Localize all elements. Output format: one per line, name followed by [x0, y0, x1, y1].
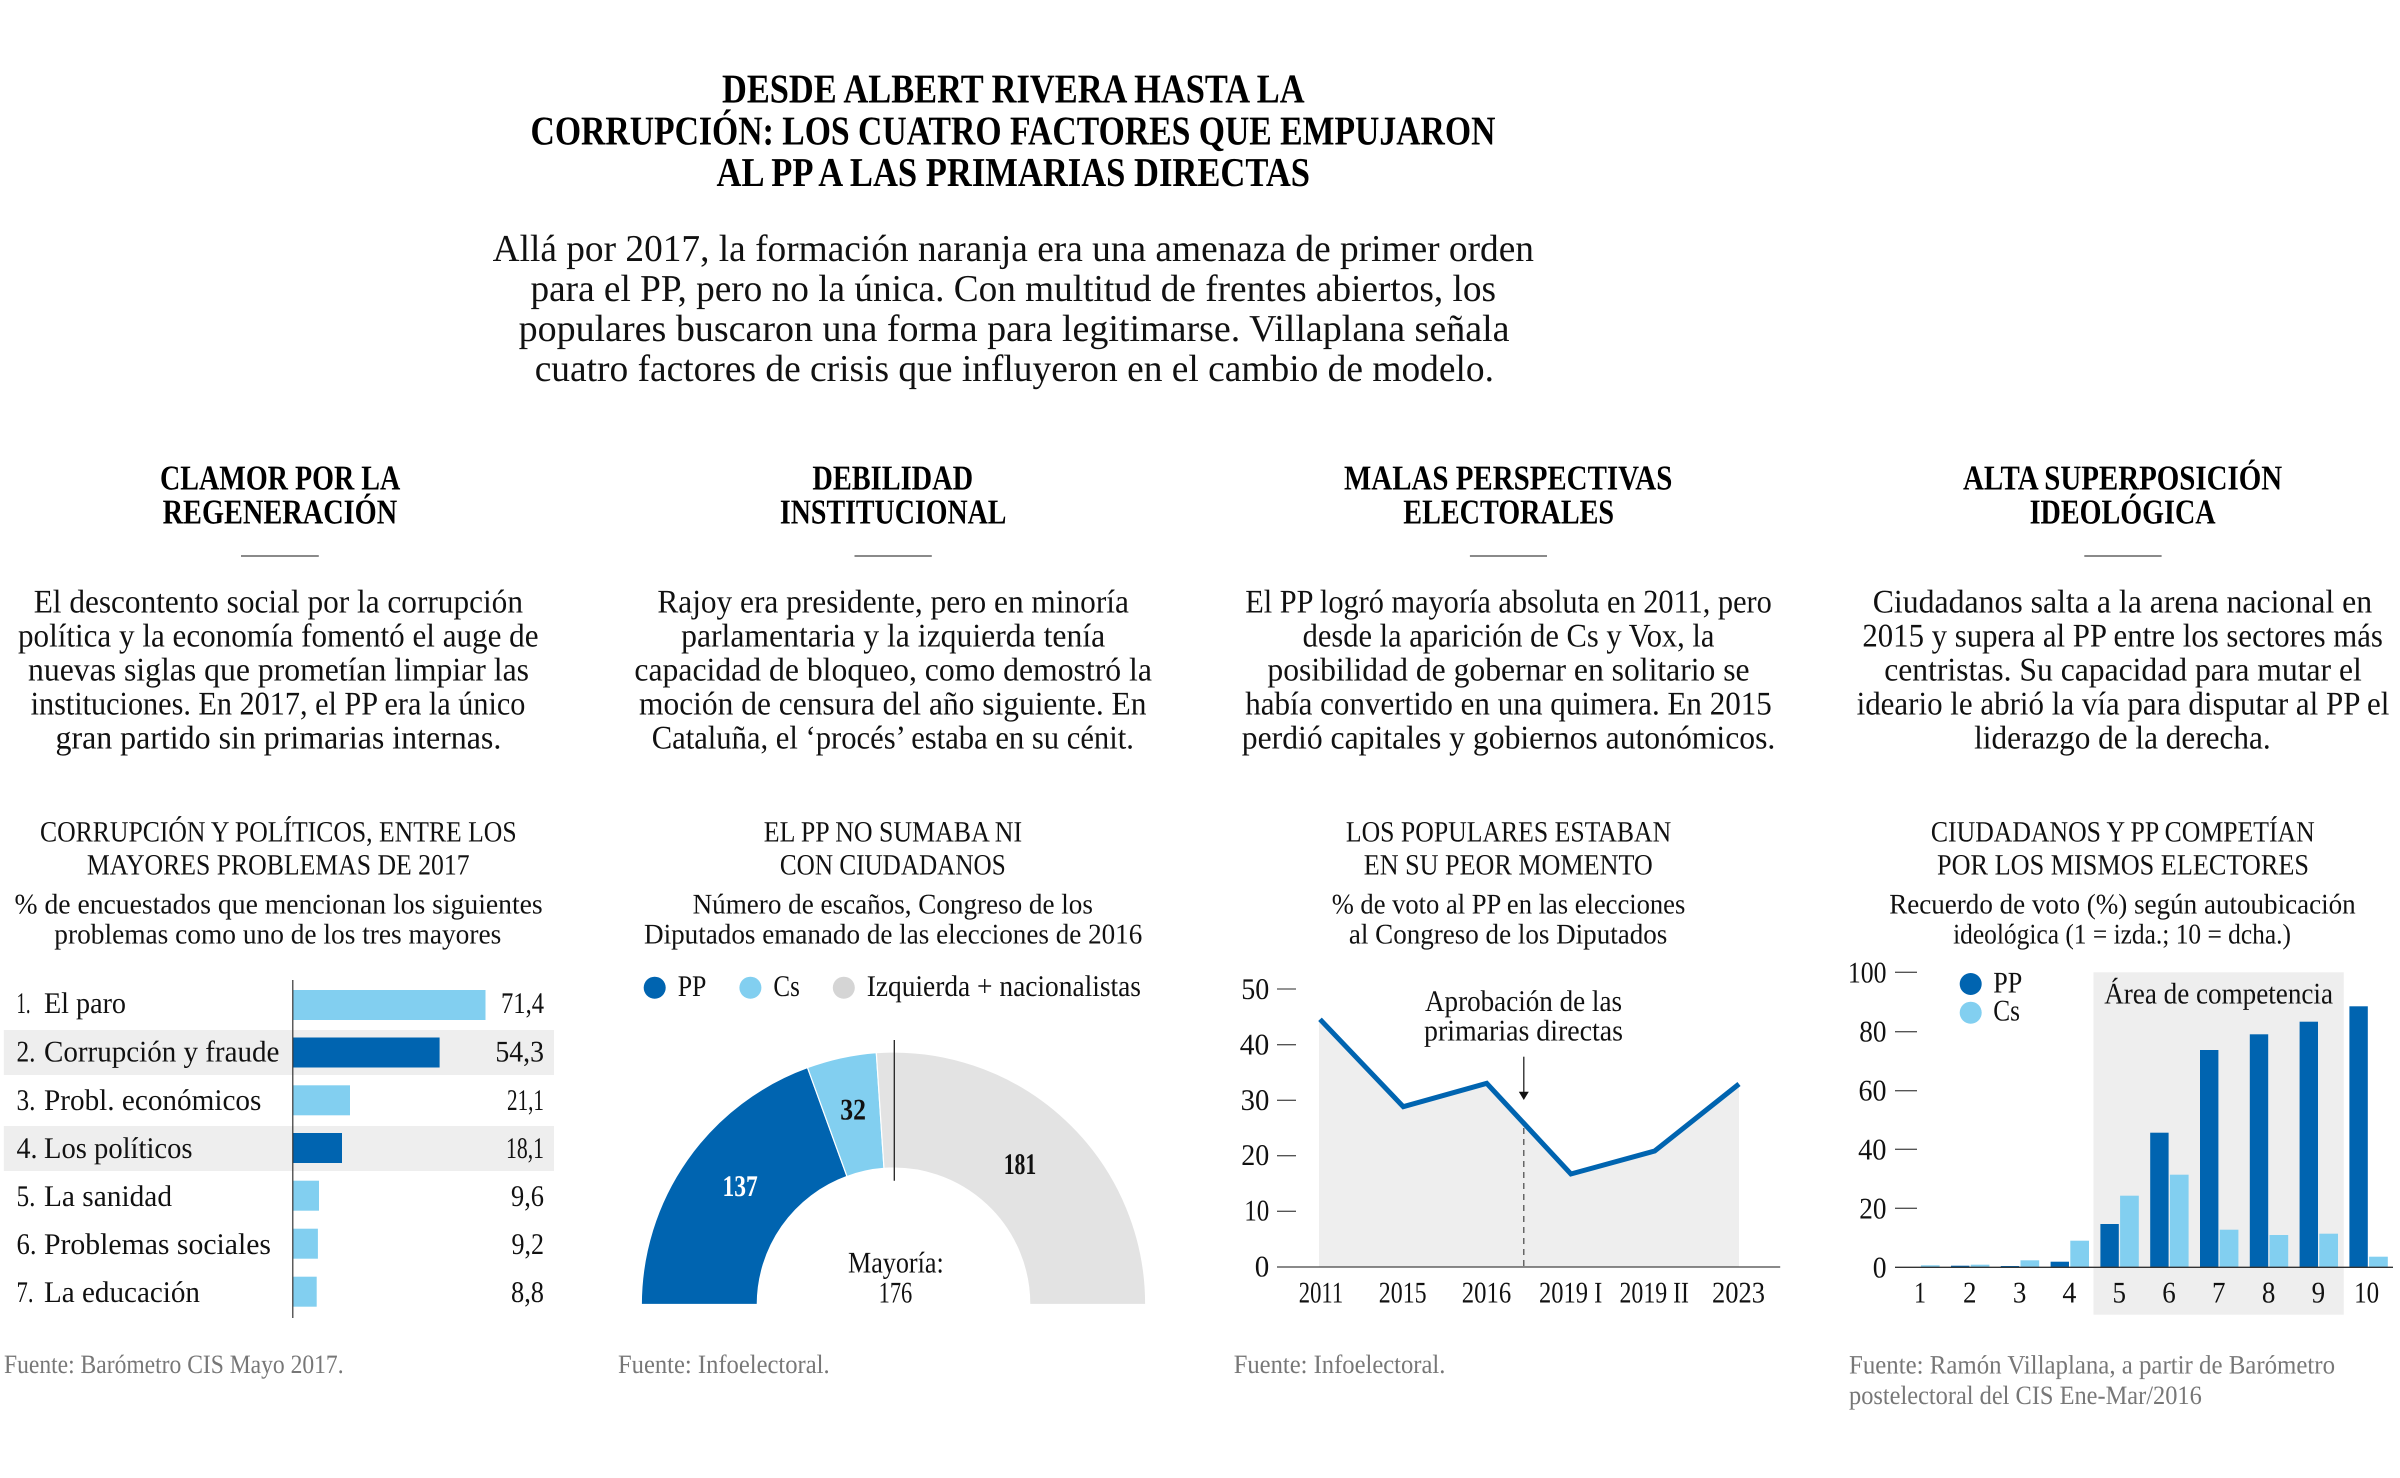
- bar: La educación: La educación: [44, 1276, 200, 1309]
- annotation: primarias directas: Aprobación de las: [1425, 985, 1622, 1018]
- body text: Rajoy era presidente, pero en minoría: [657, 585, 1129, 621]
- heading: ELECTORALES: [1403, 492, 1614, 531]
- source: Fuente: Barómetro CIS Mayo 2017.: [4, 1349, 344, 1379]
- bar: La educación: [16, 1276, 544, 1309]
- heading: [780, 458, 1006, 531]
- competition area: [2094, 972, 2344, 1315]
- x axis labels: [1299, 1277, 1765, 1310]
- body text: El PP logró mayoría absoluta en 2011, pero: [1245, 585, 1772, 621]
- y axis: 10: [1244, 1195, 1269, 1228]
- chart title: POR LOS MISMOS ELECTORES: [1937, 849, 2309, 881]
- body text: nuevas siglas que prometían limpiar las: [28, 653, 529, 689]
- body text: [1242, 585, 1775, 756]
- chart title: LOS POPULARES ESTABAN: [1346, 817, 1671, 849]
- intro text: Allá por 2017, la formación naranja era una amenaza de primer orden: [493, 228, 1534, 270]
- title: CORRUPCIÓN: LOS CUATRO FACTORES QUE EMPUJARON: [530, 108, 1496, 154]
- chart title: MAYORES PROBLEMAS DE 2017: [87, 849, 470, 881]
- body text: Ciudadanos salta a la arena nacional en: [1873, 585, 2372, 621]
- bar: Corrupción y fraude: [16, 1036, 544, 1069]
- x axis labels: 2019 II: [1620, 1277, 1689, 1310]
- data line: [1320, 1019, 1739, 1174]
- bar: Problemas sociales: 9,2: [512, 1228, 544, 1261]
- body text: instituciones. En 2017, el PP era la único: [31, 686, 525, 722]
- heading: ALTA SUPERPOSICIÓN: [1963, 458, 2282, 497]
- chart title: [1931, 816, 2315, 881]
- legend: [1960, 966, 2022, 1028]
- legend: Izquierda + nacionalistas: [867, 970, 1141, 1003]
- heading: MALAS PERSPECTIVAS: [1344, 458, 1672, 497]
- body text: capacidad de bloqueo, como demostró la: [634, 653, 1152, 689]
- x axis labels: 7: [2212, 1277, 2226, 1310]
- bar: Problemas sociales: [16, 1228, 544, 1261]
- body text: [18, 585, 538, 756]
- heading: IDEOLÓGICA: [2030, 492, 2216, 531]
- intro text: cuatro factores de crisis que influyeron en el cambio de modelo.: [535, 348, 1494, 390]
- bars: PP: [1951, 1006, 2368, 1267]
- bar: El paro: 1.: [16, 987, 30, 1020]
- bar: El paro: El paro: [44, 987, 126, 1020]
- bar: Los políticos: 18,1: [506, 1132, 544, 1165]
- bar: Problemas económicos: 21,1: [507, 1084, 544, 1117]
- panel: debilidad institucional: [618, 458, 1152, 1379]
- bar: Problemas económicos: [16, 1084, 544, 1117]
- intro text: populares buscaron una forma para legitimarse. Villaplana señala: [519, 308, 1510, 350]
- body text: perdió capitales y gobiernos autonómicos.: [1242, 720, 1775, 756]
- bar: Corrupción y fraude: 2.: [16, 1036, 36, 1069]
- chart title: CIUDADANOS Y PP COMPETÍAN: [1931, 816, 2315, 849]
- legend: PP: [1993, 966, 2022, 999]
- chart title: EN SU PEOR MOMENTO: [1364, 849, 1653, 881]
- bar: Los políticos: Los políticos: [44, 1132, 192, 1165]
- bar: La educación: 7.: [16, 1276, 34, 1309]
- x axis labels: 6: [2162, 1277, 2176, 1310]
- chart subtitle: [1332, 889, 1685, 950]
- body text: gran partido sin primarias internas.: [56, 720, 501, 756]
- x axis labels: 2019 I: [1539, 1277, 1602, 1310]
- bar: Problemas sociales: Problemas sociales: [44, 1228, 271, 1261]
- body text: había convertido en una quimera. En 2015: [1245, 686, 1772, 722]
- chart subtitle: al Congreso de los Diputados: [1349, 919, 1667, 950]
- y axis: 40: [1858, 1133, 1886, 1166]
- chart subtitle: Número de escaños, Congreso de los: [693, 889, 1093, 920]
- x axis labels: 9: [2312, 1277, 2325, 1310]
- body text: El descontento social por la corrupción: [34, 585, 523, 621]
- intro text: [493, 228, 1534, 390]
- source: Fuente: Infoelectoral.: [1234, 1349, 1445, 1379]
- x axis labels: 2015: [1379, 1277, 1427, 1310]
- y axis: 60: [1858, 1075, 1886, 1108]
- chart subtitle: problemas como uno de los tres mayores: [54, 919, 501, 950]
- body text: liderazgo de la derecha.: [1974, 720, 2271, 756]
- y axis: 0: [1873, 1251, 1886, 1284]
- x axis labels: 10: [2354, 1277, 2379, 1310]
- heading: INSTITUCIONAL: [780, 492, 1006, 531]
- title: [530, 66, 1496, 195]
- chart title: [40, 816, 517, 881]
- bar chart: [4, 980, 554, 1318]
- body text: centristas. Su capacidad para mutar el: [1884, 653, 2362, 689]
- x axis labels: 2: [1963, 1277, 1977, 1310]
- y axis: [1240, 973, 1296, 1284]
- semicircle chart: Mayoría:: [848, 1247, 944, 1280]
- bar: Problemas económicos: 3.: [16, 1084, 36, 1117]
- source: Fuente: Infoelectoral.: [618, 1349, 830, 1379]
- bar: El paro: [16, 987, 544, 1020]
- panel: malas perspectivas electorales: [1234, 458, 1780, 1379]
- body text: política y la economía fomentó el auge de: [18, 619, 538, 655]
- chart subtitle: % de voto al PP en las elecciones: [1332, 889, 1685, 920]
- arrow: [1519, 1057, 1529, 1100]
- chart title: CORRUPCIÓN Y POLÍTICOS, ENTRE LOS: [40, 816, 517, 849]
- body text: [634, 585, 1152, 756]
- semicircle chart: 176: [879, 1277, 912, 1310]
- body text: moción de censura del año siguiente. En: [639, 686, 1146, 722]
- bar: Corrupción y fraude: Corrupción y fraude: [44, 1036, 279, 1069]
- y axis: 50: [1241, 973, 1269, 1006]
- annotation: primarias directas: [1424, 985, 1623, 1048]
- heading: REGENERACIÓN: [163, 492, 397, 531]
- title: AL PP A LAS PRIMARIAS DIRECTAS: [716, 149, 1310, 195]
- heading: [1344, 458, 1672, 531]
- body text: posibilidad de gobernar en solitario se: [1267, 653, 1750, 689]
- panel: clamor por la regeneración: [4, 458, 554, 1379]
- chart subtitle: % de encuestados que mencionan los siguientes: [14, 889, 543, 920]
- intro text: para el PP, pero no la única. Con multitud de frentes abiertos, los: [530, 268, 1496, 310]
- bar: La sanidad: [16, 1180, 544, 1213]
- y axis: 20: [1859, 1192, 1886, 1225]
- heading: [160, 458, 401, 531]
- x axis labels: 2023: [1712, 1277, 1765, 1310]
- bar: La sanidad: 9,6: [511, 1180, 544, 1213]
- heading: [1963, 458, 2282, 531]
- bar: El paro: 71,4: [501, 987, 544, 1020]
- heading: DEBILIDAD: [812, 458, 973, 497]
- chart subtitle: [1889, 889, 2356, 950]
- y axis: [1848, 957, 1917, 1284]
- x axis labels: 8: [2262, 1277, 2275, 1310]
- x axis labels: [1914, 1277, 2379, 1310]
- title: DESDE ALBERT RIVERA HASTA LA: [722, 66, 1305, 112]
- semicircle chart: [641, 1040, 1146, 1310]
- chart subtitle: [644, 889, 1142, 950]
- x axis labels: 5: [2112, 1277, 2126, 1310]
- y axis: 20: [1241, 1139, 1269, 1172]
- x axis labels: 1: [1914, 1277, 1926, 1310]
- legend: Cs: [773, 970, 800, 1003]
- body text: parlamentaria y la izquierda tenía: [681, 619, 1106, 655]
- bar: La sanidad: La sanidad: [44, 1180, 172, 1213]
- chart title: EL PP NO SUMABA NI: [764, 817, 1022, 849]
- y axis: 30: [1241, 1084, 1269, 1117]
- legend: PP: [678, 970, 706, 1003]
- x axis labels: 4: [2062, 1277, 2076, 1310]
- source: Fuente: Ramón Villaplana, a partir de Barómetro: [1849, 1349, 2335, 1379]
- chart subtitle: Diputados emanado de las elecciones de 2016: [644, 919, 1142, 950]
- chart subtitle: [14, 889, 543, 950]
- x axis labels: 2011: [1299, 1277, 1343, 1310]
- bar: Problemas sociales: 6.: [16, 1228, 36, 1261]
- source: [1849, 1349, 2335, 1410]
- chart subtitle: Recuerdo de voto (%) según autoubicación: [1889, 889, 2356, 920]
- heading: CLAMOR POR LA: [160, 458, 401, 497]
- bar: La sanidad: 5.: [16, 1180, 36, 1213]
- y axis: 100: [1848, 957, 1886, 990]
- bar: Problemas económicos: Probl. económicos: [44, 1084, 261, 1117]
- bar: Los políticos: 4.: [16, 1132, 38, 1165]
- x axis labels: 2016: [1462, 1277, 1511, 1310]
- chart title: [764, 817, 1022, 881]
- competition area: Área de competencia: [2104, 978, 2333, 1011]
- body text: [1857, 585, 2389, 756]
- semicircle chart: 32: [840, 1093, 866, 1126]
- y axis: 40: [1240, 1029, 1269, 1062]
- chart title: CON CIUDADANOS: [780, 849, 1006, 881]
- y axis: 0: [1255, 1251, 1269, 1284]
- y axis: 80: [1859, 1016, 1886, 1049]
- source: postelectoral del CIS Ene-Mar/2016: [1849, 1380, 2202, 1410]
- line chart: [1240, 973, 1780, 1310]
- annotation: primarias directas: primarias directas: [1424, 1015, 1623, 1048]
- legend: [644, 970, 1141, 1003]
- bar: Los políticos: [16, 1132, 544, 1165]
- bar: La educación: 8,8: [511, 1276, 544, 1309]
- chart title: [1346, 817, 1671, 881]
- bar: Corrupción y fraude: 54,3: [495, 1036, 544, 1069]
- panel: alta superposición ideológica: [1848, 458, 2393, 1410]
- semicircle chart: 181: [1004, 1148, 1036, 1181]
- x axis labels: 3: [2013, 1277, 2026, 1310]
- chart subtitle: ideológica (1 = izda.; 10 = dcha.): [1953, 919, 2291, 950]
- grouped bar chart: [1848, 957, 2393, 1315]
- body text: Cataluña, el ‘procés’ estaba en su cénit.: [652, 720, 1134, 756]
- semicircle chart: 137: [722, 1170, 758, 1203]
- body text: desde la aparición de Cs y Vox, la: [1303, 619, 1715, 655]
- bars: Cs: [1921, 1175, 2388, 1267]
- legend: Cs: [1993, 995, 2020, 1028]
